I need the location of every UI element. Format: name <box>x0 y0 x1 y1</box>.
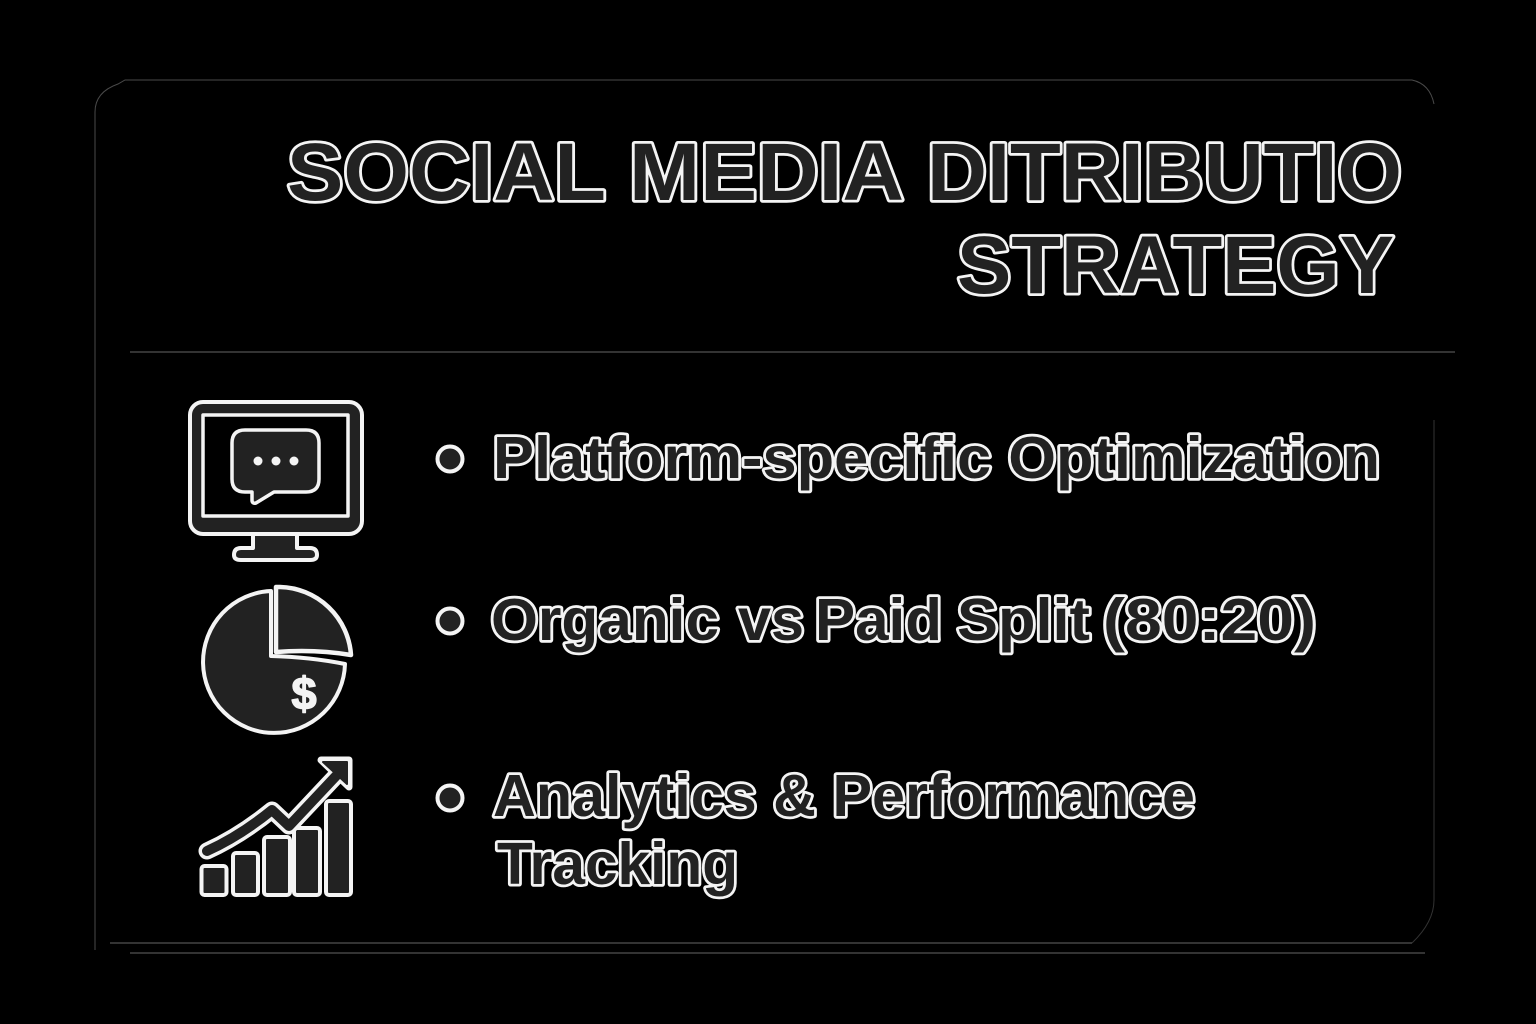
text: analytics and performance tracking <box>493 763 1195 897</box>
title <box>287 127 1402 311</box>
text: platform optimization: Platform-specific Optimization <box>493 425 1380 491</box>
text: analytics and performance tracking: Tracking <box>497 831 738 897</box>
card frame <box>95 80 1455 953</box>
icon: pie chart with dollar sign: $ <box>291 668 317 719</box>
text: organic vs paid: (80:20) <box>1103 587 1316 653</box>
text: organic vs paid: Paid <box>815 587 942 653</box>
text: organic vs paid <box>491 587 1316 653</box>
title: SOCIAL <box>287 127 606 218</box>
title: STRATEGY <box>957 220 1394 311</box>
text: organic vs paid: vs <box>738 587 804 653</box>
bullet: analytics <box>438 786 462 810</box>
title: MEDIA <box>629 127 904 218</box>
text: organic vs paid: Split <box>957 587 1090 653</box>
text: organic vs paid: Organic <box>491 587 719 653</box>
text: analytics and performance tracking: Analytics & Performance <box>493 763 1195 829</box>
icon: pie chart with dollar sign <box>203 587 351 733</box>
icon: monitor with chat bubble <box>190 402 362 560</box>
title: DITRIBUTIO <box>927 127 1402 218</box>
bullet: platform optimization <box>438 446 462 472</box>
bullet: organic vs paid <box>438 608 462 634</box>
icon: growth bars with rising arrow <box>202 760 351 895</box>
